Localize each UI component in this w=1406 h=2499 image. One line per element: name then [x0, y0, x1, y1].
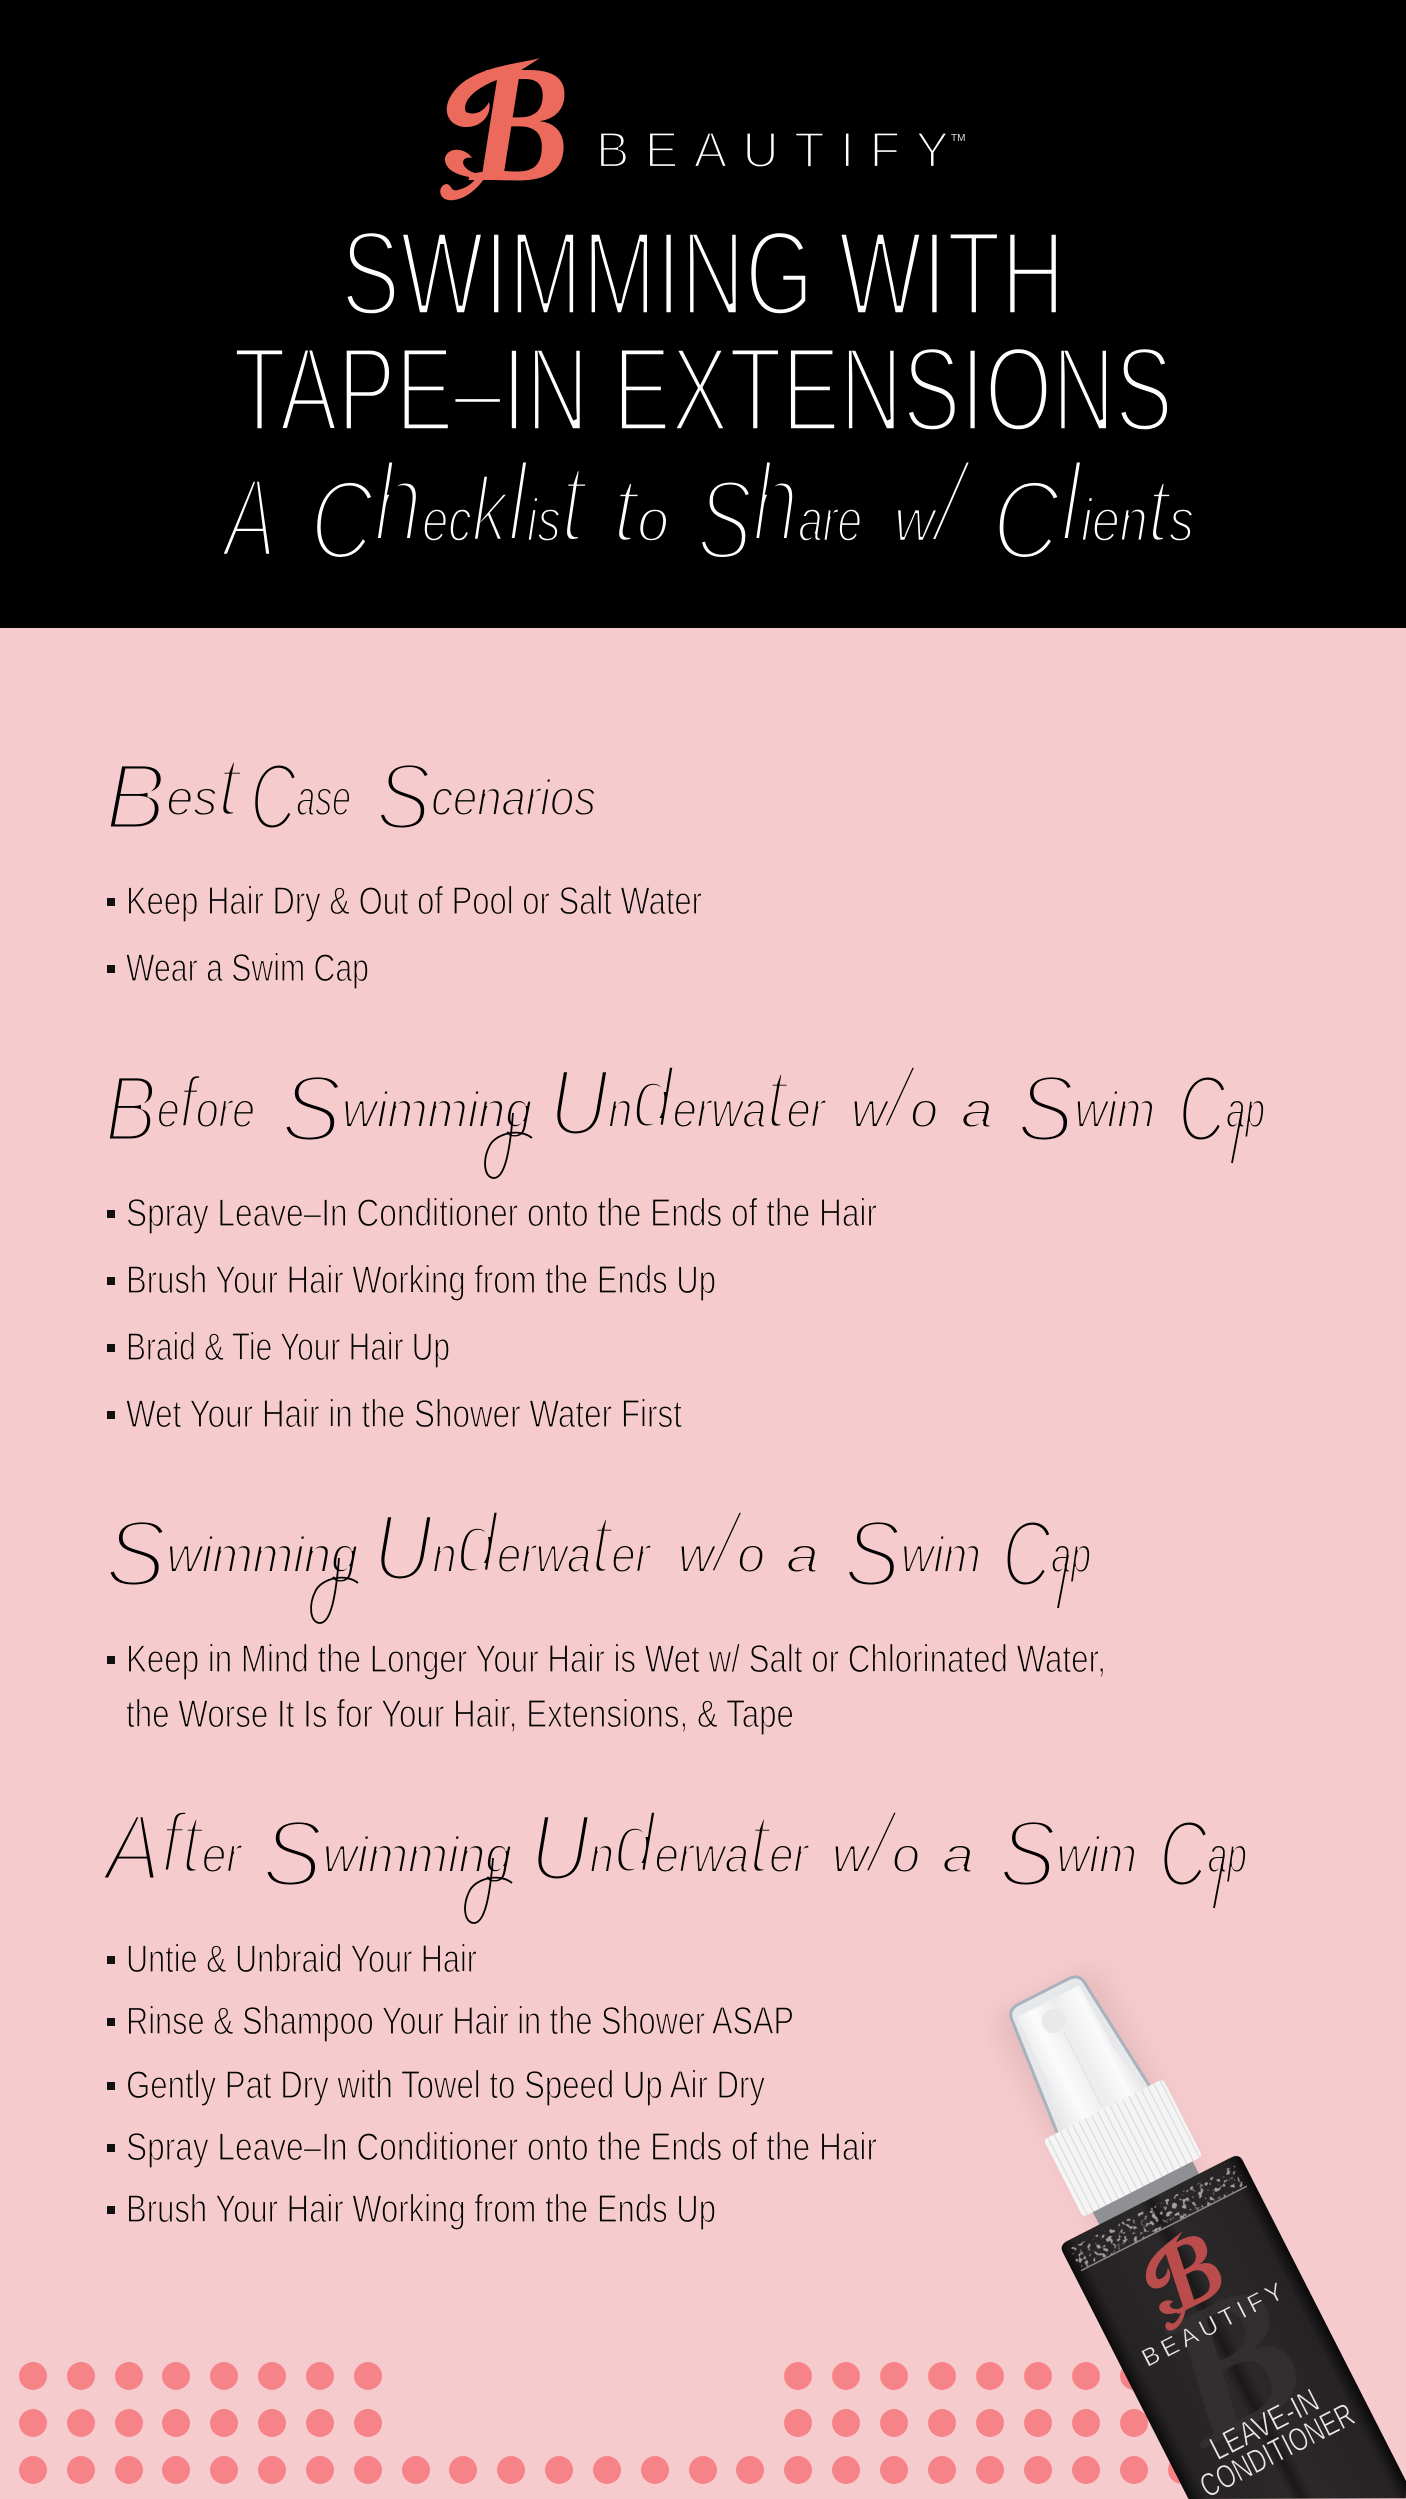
script subtitle: l — [1060, 440, 1083, 565]
heading: after swimming: wim — [1056, 1827, 1137, 1883]
logo: trademark: TM — [951, 133, 965, 144]
heading: before swimming: wim — [1074, 1082, 1155, 1138]
section: best case scenarios — [105, 739, 702, 990]
heading: after swimming: U — [530, 1795, 591, 1901]
bullet list: after swimming: Rinse & Shampoo Your Hair in the Shower ASAP — [126, 2000, 794, 2043]
ribbed white collar — [1044, 2079, 1202, 2217]
logo: script B mark: B — [468, 31, 570, 217]
script subtitle: C — [310, 457, 375, 583]
heading: best case scenarios: C — [250, 744, 297, 850]
bullet list: before swimming: Braid & Tie Your Hair Up — [126, 1326, 450, 1369]
panel: black header — [0, 0, 1406, 628]
heading: after swimming: derwater — [614, 1796, 814, 1890]
script subtitle: ients — [1081, 459, 1199, 561]
bullet text: swimming underwater: Keep in Mind the Longer Your Hair is Wet w/ Salt or Chlorinated Water, — [126, 1638, 1106, 1681]
faint watermark B: B — [1125, 2242, 1335, 2487]
bullet list: after swimming: Spray Leave–In Conditioner onto the Ends of the Hair — [126, 2126, 877, 2169]
heading: before swimming: wimming — [342, 1082, 532, 1138]
bottle neck — [1093, 2161, 1200, 2226]
heading: after swimming: A — [101, 1795, 161, 1901]
clear spray cap — [997, 1968, 1151, 2136]
heading: after swimming: a — [942, 1827, 974, 1883]
heading: swimming underwater: C — [1002, 1501, 1052, 1607]
heading: before swimming: fore — [180, 1063, 268, 1143]
heading: best case scenarios: B — [105, 744, 166, 850]
bullet list: before swimming: Brush Your Hair Working from the Ends Up — [126, 1259, 716, 1302]
heading: after swimming: er — [202, 1827, 243, 1883]
bottle soft shadow — [990, 1964, 1206, 2233]
section: after swimming — [101, 1795, 1247, 2231]
script subtitle: ecklist — [422, 440, 592, 565]
heading: swimming underwater: wimming — [167, 1527, 358, 1583]
heading: before swimming: U — [549, 1050, 610, 1156]
script subtitle: w/ — [894, 440, 973, 565]
script subtitle — [220, 440, 1194, 583]
heading: swimming underwater: U — [373, 1495, 434, 1601]
heading: before swimming: B — [105, 1056, 157, 1162]
speckled label band — [1070, 2164, 1247, 2271]
product: leave-in conditioner spray bottle — [953, 1946, 1406, 2499]
heading: after swimming: C — [1159, 1801, 1209, 1907]
heading: after swimming: ft — [161, 1796, 205, 1890]
bullet list: before swimming: Wet Your Hair in the Shower Water First — [126, 1393, 682, 1436]
heading: best case scenarios — [105, 739, 596, 850]
bottle logo B: B — [1138, 2210, 1241, 2334]
heading: before swimming: a — [961, 1082, 993, 1138]
heading: after swimming: S — [262, 1801, 323, 1907]
decorative dot pattern — [19, 2362, 1196, 2484]
bullet list: best case: Keep Hair Dry & Out of Pool or Salt Water — [126, 880, 702, 923]
heading: best case scenarios: ase — [296, 770, 351, 826]
heading: best case scenarios: t — [217, 739, 244, 833]
heading: before swimming: S — [1017, 1056, 1074, 1162]
heading: swimming underwater — [105, 1495, 1091, 1623]
bullet list: after swimming: Untie & Unbraid Your Hair — [126, 1938, 477, 1981]
bullet list: before swimming: Spray Leave–In Conditioner onto the Ends of the Hair — [126, 1192, 877, 1235]
heading: before swimming: C — [1178, 1056, 1227, 1162]
bullet list: after swimming: Gently Pat Dry with Towel to Speed Up Air Dry — [126, 2064, 765, 2107]
script subtitle: A — [220, 455, 276, 581]
bullet list: best case: Wear a Swim Cap — [126, 947, 369, 990]
section: before swimming — [105, 1050, 1265, 1436]
heading: after swimming: ap — [1208, 1827, 1247, 1883]
heading: swimming underwater: S — [844, 1501, 901, 1607]
heading: before swimming: S — [281, 1056, 342, 1162]
heading: swimming underwater: derwater — [457, 1496, 656, 1590]
heading: before swimming: w/o — [851, 1051, 938, 1145]
black bottle body — [1059, 2153, 1406, 2499]
heading: before swimming: n — [608, 1082, 632, 1138]
bullet list: before swimming — [107, 1192, 877, 1436]
heading: after swimming: S — [999, 1801, 1056, 1907]
heading: swimming underwater: S — [105, 1501, 167, 1607]
heading: before swimming — [105, 1050, 1265, 1178]
heading: after swimming: n — [590, 1827, 614, 1883]
heading: swimming underwater: ap — [1051, 1527, 1091, 1583]
heading: swimming underwater: a — [786, 1527, 819, 1583]
heading: before swimming: ap — [1226, 1082, 1265, 1138]
heading: best case scenarios: S — [376, 744, 431, 850]
heading: after swimming: wimming — [323, 1827, 512, 1883]
bullet text: swimming underwater — [107, 1638, 1106, 1736]
title line one: SWIMMING WITH — [341, 205, 1065, 341]
heading: after swimming: w/o — [832, 1796, 920, 1890]
heading: best case scenarios: cenarios — [431, 770, 596, 826]
logo: BEAUTIFY wordmark: BEAUTIFY — [596, 122, 949, 178]
section: swimming underwater — [105, 1495, 1106, 1736]
heading: best case scenarios: es — [166, 770, 217, 826]
heading: swimming underwater: w/o — [678, 1496, 765, 1590]
bottle brand name: BEAUTIFY — [1137, 2277, 1288, 2373]
script subtitle: h — [752, 440, 798, 565]
heading: swimming underwater: wim — [901, 1527, 981, 1583]
bullet list: after swimming: Brush Your Hair Working from the Ends Up — [126, 2188, 716, 2231]
bullet list: best case — [107, 880, 702, 990]
script subtitle: S — [697, 457, 752, 583]
bullet text: swimming underwater: the Worse It Is for Your Hair, Extensions, & Tape — [126, 1693, 794, 1736]
script subtitle: to — [613, 459, 669, 561]
script subtitle: h — [374, 440, 422, 565]
heading: before swimming: derwater — [632, 1051, 831, 1145]
script subtitle: are — [798, 487, 862, 554]
product name line one: LEAVE-IN — [1204, 2381, 1325, 2467]
script subtitle: C — [992, 457, 1061, 583]
bullet list: after swimming — [107, 1938, 877, 2231]
heading: before swimming: e — [157, 1082, 180, 1138]
heading: swimming underwater: n — [433, 1527, 457, 1583]
heading: after swimming — [101, 1795, 1247, 1923]
